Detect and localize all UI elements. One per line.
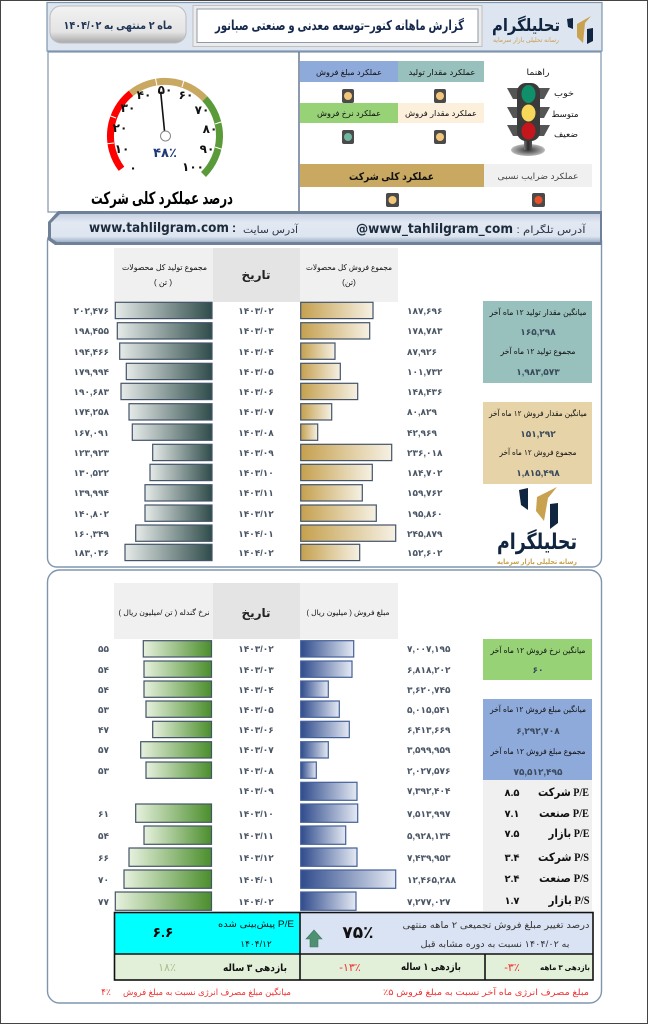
production summary box: مجموع تولید ۱۲ ماه آخر <box>500 346 576 356</box>
date column: ۱۴۰۳/۰۶ <box>238 387 274 397</box>
returns row: -۳٪ <box>504 962 520 974</box>
date column: ۱۴۰۳/۱۰ <box>238 809 274 819</box>
valuation ratios box: ۲.۴ <box>504 874 520 885</box>
sales volume column: ۱۷۸,۷۸۳ <box>407 326 443 336</box>
sales rate summary box: ۶۰ <box>532 665 544 675</box>
date pill: ماه ۲ منتهی به ۱۴۰۴/۰۲ <box>64 20 172 32</box>
sales volume column: ۱۵۲,۶۰۲ <box>407 548 443 558</box>
sales volume column: ۱۵۹,۷۶۲ <box>407 488 443 498</box>
icon: up arrow <box>306 930 322 947</box>
gauge: ۲۰ <box>113 121 127 135</box>
sales volume column: ۸۰,۸۲۹ <box>407 407 437 417</box>
sales summary box: ۱۵۱,۲۹۲ <box>520 429 556 439</box>
sales summary box: ۱,۸۱۵,۴۹۸ <box>516 468 560 478</box>
production column: ۱۹۴,۴۶۶ <box>74 347 109 357</box>
sales volume column: ۱۸۷,۶۹۶ <box>407 306 442 316</box>
date column: ۱۴۰۳/۰۹ <box>238 448 274 458</box>
address bar: : <box>232 220 236 235</box>
address bar: www.tahlilgram.com <box>89 220 229 236</box>
returns row: بازدهی ۳ ساله <box>223 963 287 974</box>
sales value summary box: ۶,۲۹۲,۷۰۸ <box>516 726 560 736</box>
performance indicators: عملکرد مقدار فروش <box>405 109 477 118</box>
date column: ۱۴۰۴/۰۱ <box>238 875 274 885</box>
production column: ۱۷۴,۲۵۸ <box>74 407 109 417</box>
sales summary box: میانگین مقدار فروش ۱۲ ماه آخر <box>488 408 587 418</box>
production column: ۱۶۷,۰۹۱ <box>74 428 109 438</box>
pellet rate column: نرخ گندله ( تن /میلیون ریال ) <box>118 608 210 617</box>
sales value column: ۲,۰۲۷,۵۷۶ <box>407 766 450 776</box>
report title: گزارش ماهانه کنور–توسعه معدنی و صنعتی صبانور <box>214 17 464 33</box>
pellet rate column: ۵۵ <box>98 644 109 654</box>
date column: تاریخ <box>241 268 271 282</box>
sales value column: ۶,۸۱۸,۲۰۲ <box>407 665 451 675</box>
sales value column: ۳,۶۲۰,۷۴۵ <box>407 685 451 695</box>
pellet rate column: ۵۴ <box>98 685 109 695</box>
sales value column: ۷,۲۷۷,۰۲۷ <box>407 897 451 907</box>
returns row: بازدهی ۳ ماهه <box>540 963 590 972</box>
traffic light legend: راهنما <box>526 67 550 77</box>
gauge: ۶۰ <box>179 88 193 102</box>
date column: ۱۴۰۳/۰۷ <box>238 407 274 417</box>
header logo <box>492 15 593 44</box>
returns row: بازدهی ۱ ساله <box>401 962 461 973</box>
sales change callout <box>306 920 590 949</box>
sales volume column: (تن) <box>342 278 356 287</box>
sales volume column: ۴۲,۹۶۹ <box>407 428 437 438</box>
production summary box: میانگین مقدار تولید ۱۲ ماه آخر <box>489 307 586 317</box>
valuation ratios box: P/S شرکت <box>538 852 589 864</box>
gauge: ۴۰ <box>137 88 151 102</box>
pellet rate column: ۶۱ <box>98 809 109 819</box>
pellet rate column: ۵۳ <box>98 705 109 715</box>
production column: ۱۲۳,۹۲۳ <box>74 448 109 458</box>
performance indicators: عملکرد مقدار تولید <box>408 68 476 77</box>
traffic light legend: متوسط <box>552 109 578 119</box>
energy cost notes: مبلغ مصرف انرژی ماه آخر نسبت به مبلغ فروش ۵٪ <box>383 986 589 997</box>
sales rate summary box: میانگین نرخ فروش ۱۲ ماه آخر <box>490 645 586 655</box>
header logo: رسانه تحلیلی بازار سرمایه <box>493 37 559 44</box>
sales value column: ۷,۳۹۲,۴۰۴ <box>407 786 451 796</box>
sales value summary box: میانگین مبلغ فروش ۱۲ ماه آخر <box>489 704 586 714</box>
gauge: ۹۰ <box>200 142 214 156</box>
gauge: ۱۰ <box>115 142 129 156</box>
sales change callout: ۷۵٪ <box>342 923 374 942</box>
gauge value: ۴۸٪ <box>153 145 177 160</box>
date column: ۱۴۰۳/۰۳ <box>238 665 274 675</box>
valuation ratios box: ۷.۵ <box>504 829 520 840</box>
sales volume column: ۲۳۶,۰۱۸ <box>407 448 443 458</box>
sales value summary box: مجموع مبلغ فروش ۱۲ ماه آخر <box>490 746 586 756</box>
energy cost notes <box>101 986 589 997</box>
pellet rate column <box>98 583 213 910</box>
valuation ratios box: P/S صنعت <box>539 873 589 885</box>
sales volume column: ۱۴۸,۴۳۶ <box>407 387 442 397</box>
address bar <box>48 211 602 245</box>
production column: ۱۳۰,۵۲۲ <box>74 468 109 478</box>
valuation ratios box: ۱.۷ <box>504 896 520 907</box>
date column: ۱۴۰۳/۱۱ <box>238 831 274 841</box>
date column <box>213 583 300 907</box>
production summary box: ۱,۹۸۳,۵۷۳ <box>516 367 560 377</box>
date column: ۱۴۰۳/۰۶ <box>238 725 274 735</box>
date column: ۱۴۰۳/۰۸ <box>238 766 274 776</box>
date column: ۱۴۰۳/۱۱ <box>238 488 274 498</box>
date column: ۱۴۰۴/۰۱ <box>238 529 274 539</box>
date column: ۱۴۰۴/۰۲ <box>238 897 274 907</box>
header logo: تحلیلگرام <box>492 15 560 36</box>
gauge: ۳۰ <box>121 101 135 115</box>
sales value column: ۶,۴۱۳,۶۶۹ <box>407 725 451 735</box>
date column: ۱۴۰۳/۰۲ <box>238 644 274 654</box>
valuation ratios box <box>483 780 592 911</box>
date column: ۱۴۰۳/۰۲ <box>238 306 274 316</box>
forecast P/E: ۱۴۰۴/۱۲ <box>240 939 272 949</box>
pellet rate column: ۵۴ <box>98 665 109 675</box>
sales volume column: ۱۰۱,۷۳۲ <box>407 367 443 377</box>
sales volume column: ۱۸۴,۷۰۲ <box>407 468 443 478</box>
overall performance row: عملکرد ضرایب نسبی <box>498 171 578 181</box>
production column: ۱۷۹,۹۹۴ <box>74 367 109 377</box>
traffic light legend: ضعیف <box>554 129 578 139</box>
date column: ۱۴۰۳/۰۹ <box>238 786 274 796</box>
sales volume column: ۸۷,۹۲۶ <box>407 347 437 357</box>
traffic light legend <box>507 67 578 156</box>
sales value column <box>300 583 456 910</box>
date column: ۱۴۰۳/۰۳ <box>238 326 274 336</box>
energy cost notes: میانگین مبلغ مصرف انرژی نسبت به مبلغ فروش <box>123 987 291 997</box>
gauge: ۰ <box>129 161 137 175</box>
sales value column: ۵,۰۱۵,۵۴۱ <box>407 705 450 715</box>
sales value column: ۷,۴۳۹,۹۵۳ <box>407 853 451 863</box>
traffic light legend: خوب <box>554 88 574 98</box>
report title <box>193 6 482 46</box>
production column: ۱۴۰,۸۰۲ <box>74 509 109 519</box>
pellet rate column: ۶۶ <box>98 853 109 863</box>
sales volume column <box>300 248 443 561</box>
returns row: ۱۸٪ <box>158 962 176 974</box>
sales value summary box <box>483 699 592 780</box>
valuation ratios box: ۸.۵ <box>504 788 520 799</box>
production column <box>74 248 213 561</box>
date column: ۱۴۰۴/۰۲ <box>238 548 274 558</box>
forecast P/E <box>153 919 294 949</box>
large logo: رسانه تحلیلی بازار سرمایه <box>497 559 577 566</box>
valuation ratios box: P/E بازار <box>548 828 590 840</box>
pellet rate column: ۷۰ <box>98 875 109 885</box>
sales volume column: ۲۴۵,۸۷۹ <box>407 529 443 539</box>
production column: مجموع تولید کل محصولات <box>122 263 207 272</box>
valuation ratios box: ۳.۴ <box>504 853 520 864</box>
sales summary box <box>483 402 592 484</box>
production summary box <box>483 301 592 383</box>
performance indicators: عملکرد نرخ فروش <box>317 109 381 118</box>
valuation ratios box: P/E صنعت <box>539 808 589 820</box>
large logo: تحلیلگرام <box>497 528 577 555</box>
sales value column: ۵,۹۲۸,۱۳۴ <box>407 831 451 841</box>
date column: ۱۴۰۳/۰۵ <box>238 367 274 377</box>
gauge: ۵۰ <box>158 83 172 97</box>
date column: ۱۴۰۳/۱۲ <box>238 853 274 863</box>
sales value column: ۷,۵۱۳,۹۹۷ <box>407 809 451 819</box>
sales change callout: به ۱۴۰۴/۰۲ نسبت به دوره مشابه قبل <box>420 939 570 949</box>
sales change callout: درصد تغییر مبلغ فروش تجمیعی ۲ ماهه منتهی <box>402 920 590 930</box>
production column: ( تن ) <box>154 278 172 287</box>
pellet rate column: ۴۷ <box>98 725 109 735</box>
pellet rate column: ۵۷ <box>98 745 109 755</box>
pellet rate column: ۵۴ <box>98 831 109 841</box>
sales volume column: ۱۹۵,۸۶۰ <box>407 509 442 519</box>
production column: ۱۹۸,۴۵۵ <box>74 326 109 336</box>
date column: ۱۴۰۳/۱۲ <box>238 509 274 519</box>
gauge title: درصد عملکرد کلی شرکت <box>91 189 233 209</box>
production summary box: ۱۶۵,۲۹۸ <box>520 327 556 337</box>
gauge: ۸۰ <box>203 122 217 136</box>
panel: sales value and pellet rate <box>48 570 602 1003</box>
gauge: ۱۰۰ <box>182 160 204 174</box>
address bar: آدرس سایت <box>243 223 299 236</box>
large logo <box>497 487 577 566</box>
forecast P/E: ۶.۶ <box>153 924 173 940</box>
gauge needle <box>160 92 170 141</box>
date column: ۱۴۰۳/۰۵ <box>238 705 274 715</box>
gauge: ۷۰ <box>195 103 209 117</box>
sales value column: ۷,۰۰۷,۱۹۵ <box>407 644 451 654</box>
bottom metrics table <box>114 912 593 980</box>
production column: ۱۶۰,۳۴۹ <box>74 529 109 539</box>
date column: تاریخ <box>241 606 271 620</box>
performance indicators <box>300 61 484 144</box>
header band <box>47 2 602 51</box>
pellet rate column: ۷۷ <box>98 897 109 907</box>
panel: performance summary <box>48 52 601 212</box>
sales value column: ۳,۵۹۹,۹۵۹ <box>407 745 451 755</box>
sales value column: ۱۲,۴۶۵,۲۸۸ <box>407 875 456 885</box>
date pill <box>50 6 186 43</box>
date column: ۱۴۰۳/۰۴ <box>238 685 274 695</box>
production column: ۲۰۲,۴۷۶ <box>74 306 109 316</box>
sales value column: مبلغ فروش ( میلیون ریال ) <box>306 608 390 617</box>
returns row <box>158 962 590 974</box>
returns row: -۱۳٪ <box>339 962 361 974</box>
forecast P/E: P/E پیش‌بینی شده <box>218 919 294 929</box>
production column: ۱۹۰,۶۸۳ <box>74 387 109 397</box>
date column: ۱۴۰۳/۱۰ <box>238 468 274 478</box>
production column: ۱۸۳,۰۳۶ <box>74 548 109 558</box>
date column: ۱۴۰۳/۰۸ <box>238 428 274 438</box>
date column <box>213 248 300 558</box>
date column: ۱۴۰۳/۰۷ <box>238 745 274 755</box>
performance indicators: عملکرد مبلغ فروش <box>316 68 382 77</box>
overall performance row <box>300 164 592 207</box>
energy cost notes: ۴٪ <box>101 987 111 997</box>
valuation ratios box: ۷.۱ <box>504 809 520 820</box>
valuation ratios box: P/S بازار <box>548 895 590 907</box>
pellet rate column: ۵۳ <box>98 766 109 776</box>
sales summary box: مجموع فروش ۱۲ ماه آخر <box>499 447 576 457</box>
gauge <box>91 76 233 209</box>
panel: production and sales volume <box>48 232 602 567</box>
sales rate summary box <box>483 639 592 680</box>
date column: ۱۴۰۳/۰۴ <box>238 347 274 357</box>
address bar: آدرس تلگرام : <box>516 223 587 236</box>
production column: ۱۳۹,۹۹۴ <box>74 488 109 498</box>
sales volume column: مجموع فروش کل محصولات <box>306 263 392 272</box>
sales value summary box: ۷۵,۵۱۲,۴۹۵ <box>514 767 563 777</box>
overall performance row: عملکرد کلی شرکت <box>349 171 434 183</box>
address bar: @www_tahlilgram_com <box>356 221 513 237</box>
valuation ratios box: P/E شرکت <box>538 787 589 799</box>
